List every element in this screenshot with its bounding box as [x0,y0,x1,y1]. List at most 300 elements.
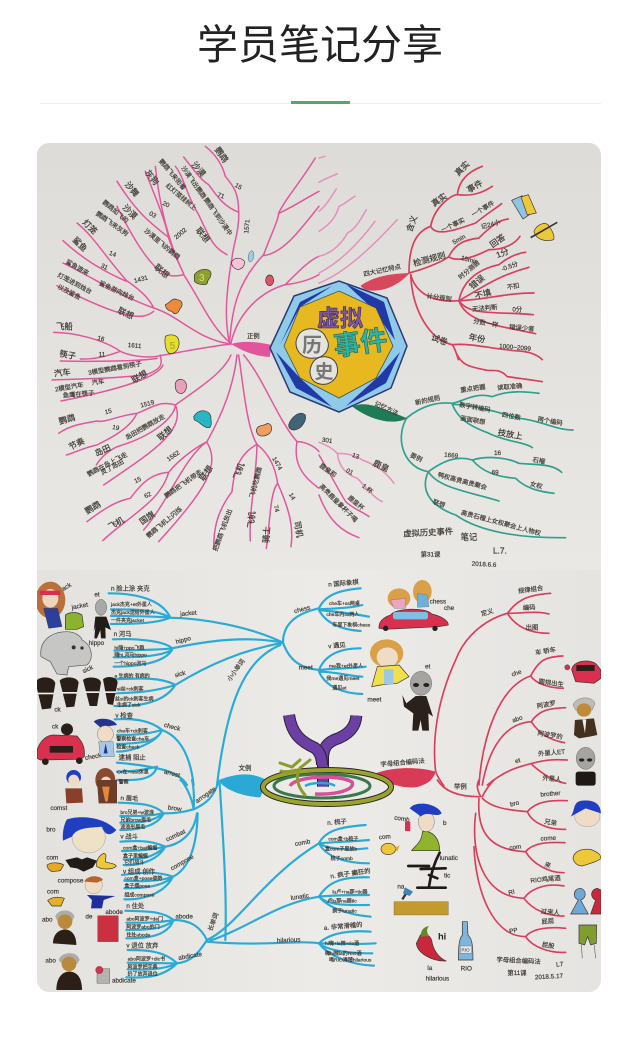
branch text: tic [444,872,450,879]
branch text: memory method and signature: L.7. [493,545,507,555]
branch text: 丝si的ck刺客生病 [115,696,153,703]
branch text: definition and planning: 1000~2099 [499,343,532,353]
icon: old man with book [56,953,110,990]
branch text: com [47,888,59,895]
branch text: 遇见et [332,684,347,691]
icon: red car front [565,661,601,683]
branches: bottom-left pink [52,355,319,552]
branch text: come [540,835,557,843]
branch text: L7 [556,961,564,969]
branch text: definition and planning: 不填 [474,287,492,301]
branch text: 兄弟 [544,816,558,827]
branch text: 外星人ET [538,747,566,758]
yellow core [284,291,393,398]
branch text: left top: 1571 [243,219,252,234]
branch text: memory method and signature: 69 [492,469,499,476]
branch text: definition and planning: 记24小 [480,217,502,231]
branch text: memory method and signature: 2018.6.6 [472,561,497,569]
icon: green pants [579,925,597,958]
branch text: left top: 鹦鹉 [213,145,230,164]
branch text: n 河马 [114,630,132,638]
branch text: definition and planning: 一个事实 [439,215,466,234]
branch text: Or在+rest休息 [117,768,149,775]
branch text: left top: 15 [233,182,243,192]
panel: student notes photo [35,143,601,992]
branch text: abo阿波罗+dic书 [128,956,165,963]
branch text: 住处abode [126,932,150,939]
branch text: RIO [461,966,472,973]
branch text: left top: 筷子 [59,348,77,361]
branch text: 第11课 [507,968,527,977]
branch text: 组成compose [124,892,155,899]
branch text: brow [167,804,182,813]
branch text: 定义 [480,606,495,618]
branch text: definition and planning: 检测规则 [412,250,447,268]
emblem text: 事件 [332,325,389,362]
branch text: PP [509,927,518,935]
spiral base rings [263,770,391,804]
branch text: definition and planning: 含义 [404,214,419,233]
branch text: hi嗨+la辣+rio酒 [325,940,359,947]
branch text: definition and planning: 1分 [495,246,510,260]
branch text: memory method and signature: 鹿皇杯 [346,493,367,512]
branch text: lower left: 62 [143,491,153,500]
icon: lunatic character [408,853,446,888]
branch text: abode [105,909,123,916]
branch text: me我+et外星人 [329,662,363,669]
icon: game pieces [571,888,601,914]
blob: central pink connector [231,342,272,357]
branch text: 盒com子里放b [325,846,357,853]
branch text: lower left: 飞机吃鹦鹉 [247,466,264,499]
branch text: abdicate [178,951,203,962]
emblem text [296,305,389,384]
icon: alien [94,599,111,638]
branch text: memory method and signature: 1.杯 [360,481,376,496]
icon: bat, arm and bottle [47,853,116,872]
icon: alien head right [576,747,596,786]
branch text: memory method and signature: 第31课 [421,550,441,559]
branch text: sick [82,664,95,675]
branch text: 车 轿车 [534,644,556,657]
branch text: 警察 [119,778,129,785]
icon: RIO bottle: RIO [461,948,470,953]
blob: blue connector [219,774,267,797]
branch text: 梳子comb [331,855,353,862]
branch text: memory method and signature: 重点把握 [460,382,487,394]
branch text: lunatic [440,855,458,862]
branch text: b [443,820,447,827]
branches: lower-right [319,780,601,983]
branch text: 举例 [454,781,467,790]
branch text: combat [165,828,187,843]
branch text: lower left: 1562 [166,449,182,463]
branch text: ck [54,707,61,714]
branch text: lower left: 骑士 [261,526,272,543]
branch text: left top: 沙漠飞出鹦鹉 [179,164,208,200]
branch text: 出图 [526,622,538,631]
branch text: che [444,605,455,612]
branch text: memory method and signature: 高贵石榴上女权聚会上人物权 [460,508,543,538]
slingshot left prong [289,715,322,765]
icon: slingshot right part [323,716,356,787]
branch text: chess [293,604,311,615]
branch text: meet [367,697,382,704]
branch text: 2018.5.17 [535,973,564,981]
branch text: lower left: 1519 [140,399,156,410]
branch text: lower left: 鹦鹉在岛上飞走 [85,449,129,478]
branch text: 字母组合编码法 [380,756,425,769]
branch text: lower left: 岛田 [93,442,112,458]
branch text: left top: 以及鲨鱼 [56,282,83,302]
branch text: hippo [89,640,105,647]
branch text: lower left: 鹦鹉把飞机带走 [162,467,204,500]
branch text: arrest [163,768,181,779]
branch text: 阿波罗的 [537,728,563,741]
branch text: left top: 鲨鱼游向烛台 [98,278,136,303]
icon: sick coffins [35,677,118,709]
branch text: lower left: 飞机 [231,461,246,481]
branch text: left top: 14 [108,250,117,259]
branch text: 检查check [116,743,140,750]
branch text: RI [508,888,516,897]
branch text: compose [58,878,84,885]
branch text: 文例 [239,763,251,772]
icon: girl meet [370,639,409,687]
branch text: com [509,843,522,852]
branch text: left top: 71 [216,192,226,201]
branch text: left top: 沙漠里飞的鹦鹉 [142,226,182,261]
branch text: 一件夹克jacket [111,617,145,624]
branch text: et [94,592,100,599]
icons: small people [65,776,117,803]
blob: red connector end [390,780,431,786]
branch text: memory method and signature: 两个编码 [537,414,563,427]
branch text: abo阿波罗+de门 [126,916,163,923]
icon: blue hair boy right [571,800,601,827]
branch text: lower left: 汽车 [91,376,105,387]
branch text: memory method and signature: 读取准确 [497,381,523,392]
branch text: chess [430,598,446,605]
branch text: ck [52,723,59,730]
branch text: left top: 红灯笼挂树上 [164,181,199,213]
branch text: left top: 沙舞 [123,180,141,199]
icon: book [512,195,536,219]
branch text: 逮捕 阻止 [119,752,146,761]
emblem text: 史 [314,361,334,383]
branch text: definition and planning: 真实 [429,191,449,209]
panel: history events mind map [52,145,573,569]
branch text: compose [169,853,196,872]
branch text: definition and planning: 回答 [488,231,508,250]
branch text: 车里下象棋chess [332,622,371,629]
branch text: definition and planning: 计分规则 [426,291,452,303]
branch text: 扔了放弃退位 [128,970,158,977]
branch text: 警察检查che车 [116,736,149,743]
emblem text: 虚拟 [317,305,363,331]
central emblem: history events octagon [270,281,407,412]
branch text: che车内ss两人 [326,611,359,618]
icon: blue-haired boy [63,817,116,853]
branch text: 规律组合 [517,583,544,595]
branch text: memory method and signature: 虚拟历史事件 [403,526,453,539]
branch text: memory method and signature: 16 [494,450,502,457]
branches: bottom-right green [318,355,573,569]
branch text: comb [394,814,411,824]
branch text: left top: 2002 [173,226,189,241]
branch text: 一个hippo河马 [114,660,146,667]
branch text: left top: 鹦鹉飞来灰狗 [94,209,130,238]
branch text: left top: 31 [99,262,109,272]
branch text: left top: 联想 [152,262,172,280]
branch text: n 国际象棋 [328,577,360,589]
branch text: 它们战斗 [124,859,144,866]
branch text: left top: 1611 [127,342,142,350]
branch text: hi嗨+ppo飞跑 [114,644,144,651]
branch text: definition and planning: 错误少者 [509,322,535,333]
blob: red connector [376,768,436,788]
branch text: 兄弟brow眉毛 [120,816,151,823]
icon: hippo [41,632,91,675]
branch text: memory method and signature: 要例 [409,450,424,464]
branch text: lower left: 14 [287,492,297,502]
branch text: lower left: 19 [112,424,120,432]
branch text: n. 梳子 [327,816,348,827]
icon: hammer and log [394,887,448,915]
branch text: definition and planning: 四大记忆特点 [363,261,402,278]
branch text [42,785,311,985]
icon: girl with jacket [35,582,84,629]
branch text: lower left: 飞机 [246,510,257,528]
branch text: definition and planning: 事件 [465,178,484,195]
branch text: bro [509,799,520,809]
branch text: left top: 飞船 [56,322,73,332]
branch text: lower left: 74 [272,504,280,513]
icon: yellow teapot [381,843,400,855]
branch text: memory method and signature: 石榴 [532,455,547,466]
branch text: 阿波罗 [536,698,556,710]
branch text: lower left: 汽车 [53,366,71,379]
branch text: 编码 [523,602,536,612]
branch text: lower left: 岛田把鹦鹉放走 [123,411,167,442]
branch text: v 组成 创作 [123,866,156,875]
branch text: definition and planning: 真实 [453,159,472,178]
branch text: left top: 03 [148,210,158,220]
branch text: lower left: 1474 [270,456,284,472]
branch text: lower left: 灵了岛田 [99,457,125,477]
branch text: memory method and signature: 笔记 [461,532,477,542]
branch text: lower left: 3模型鹦鹉看到筷子 [87,359,143,377]
branch text: definition and planning: 5min [451,233,467,246]
branch text: comb [294,838,311,848]
branch text: memory method and signature: 数字转编码 [459,400,491,414]
branch text: lower left: 国旗 [137,509,157,527]
branch text: comst [50,805,67,812]
branch text: a. 非常滑稽的 [323,920,363,932]
branch text: memory method and signature: 13 [351,452,360,461]
branch text: v 遇见 [328,641,346,650]
branch text: 长单词 [205,911,220,932]
branch text: a 生病的 有病的 [114,672,150,679]
branch text: left top: 16 [96,335,106,344]
branch text: 阿波罗abo的门 [126,924,160,931]
branch text: check [84,752,103,762]
branch text: definition and planning: 年份 [468,332,487,345]
branch text: lu卢+na那+tic踢 [332,888,368,895]
branch text: lower left: 15 [133,476,143,485]
branches: top-left pink [54,145,319,361]
icon: yellow glove [573,849,601,866]
branch text: lower left: 联想 [130,368,149,385]
icon: hand holding pen [531,222,557,241]
title divider with green accent [40,101,601,104]
branch text: che车+ss两桌 [329,600,360,607]
branch text: meet [299,664,313,671]
branch text: hi [438,931,446,941]
branch text: lower left [53,359,305,552]
icon: old man with door [53,910,118,945]
title: 学员笔记分享 [197,11,443,71]
branch text [326,577,566,784]
icon: compose person [48,876,115,908]
branch text: 小小单词 [225,657,246,683]
branch text: hilarious [277,936,301,945]
branch text: bro兄弟+w波浪 [120,809,154,816]
branch text: left top: 沙漠 [189,160,208,179]
branch text: definition and planning [363,159,535,353]
branch text: jacket [179,610,197,618]
branch text: left top: 灰狗 [143,168,161,187]
branch text: memory method and signature: 画面联想 [460,413,487,426]
branch text: la [427,965,433,972]
branch text: 字母组合编码法 [496,955,541,966]
branch text: definition and planning: 错误 [467,272,487,291]
branch text: jack [59,581,73,594]
branch text: memory method and signature: 1669 [444,452,459,460]
branch text: definition and planning: -0.5分 [500,259,520,273]
branch text: 外星人 [542,773,563,784]
branch text: RIO鸡尾酒 [530,873,562,885]
branch text: v 退位 放弃 [126,941,158,950]
branch text: de [85,913,93,920]
icon: policeman [94,719,117,757]
branch text: brother [540,790,561,799]
branch text: abode [175,913,193,920]
branch text: 嗨hi辣la的RIO酒 [325,950,362,957]
branch text: memory method and signature: 联想 [432,497,447,510]
branch text: definition and planning: 试卷 [430,332,450,347]
branch text: v 检查 [115,710,134,719]
branches: lower-left [42,774,319,990]
branch text: 疯子lunatic [332,908,357,915]
branches: upper-right [319,577,601,788]
branch text: lower left: 把鹦鹉飞机放出 [210,508,234,552]
branch text: memory method and signature [318,381,563,569]
branch text: left top: 联想 [116,305,135,321]
branch text: 卢lu那na踢tic [327,898,357,905]
branch text: lower left: 飞机 [106,514,126,532]
branch text: 过来人 [540,906,561,917]
branch text: left top: 灯笼 [81,217,99,236]
branch text: 喝RIO滑稽hilarious [329,957,372,964]
branch text: left top: 鹦鹉如飞的 [101,198,131,225]
branch text: abo [45,958,56,965]
emblem text: 历 [302,335,322,357]
branch text: abo [511,714,524,725]
branch text: lower left: 鹦鹉飞机上闪烁 [144,504,184,540]
branch text: n 脸上涂 夹克 [111,584,150,593]
branch text: lower left: 15 [104,408,113,416]
branch text: left top: 鲨鱼游来 [64,257,91,278]
branch text: hippo [175,635,192,646]
branch text: lower left: 鹦鹉 [83,499,102,516]
branch text: left top: 鲨鱼 [71,235,89,254]
snake figure [280,760,310,795]
branch text: lunatic [290,892,309,902]
branch text: definition and planning: 一个事件 [469,198,496,219]
branch text: na [397,883,405,890]
branch text: memory method and signature: 女权 [529,479,544,491]
branch text [323,781,564,983]
branch text: 盒子摆pose [124,882,150,889]
branch text: n. 疯子 癫狂的 [330,866,371,880]
branch text: memory method and signature: 四位数 [501,410,522,422]
icon: chili [416,926,446,961]
branch text: 嗨hi,河马hippo [114,652,147,659]
branch text: che [511,668,523,679]
branches: top-right red [319,156,557,360]
branch text: left top: 11 [99,351,106,358]
branch text: memory method and signature: 技放上 [497,427,523,441]
branch text: bro [46,827,56,834]
branch text [52,581,313,785]
branch text: left top: 鹦鹉飞到沙漠中 [202,196,235,237]
branch text: check [163,722,182,733]
branch text: lower left: 鹦鹉 [58,412,76,426]
branch text: com [46,854,58,861]
branch text: definition and planning: 15min [460,255,479,266]
branch text: arrogate [194,785,218,805]
icon: old man [573,698,597,738]
icon: red car with two girls [379,580,448,631]
branch text: lower left: 2模型汽车 [54,380,84,394]
number icons [175,379,306,436]
branch text: lower left: 鱼鹰在筷子 [62,388,95,400]
branch text: memory method and signature: 301 [321,437,333,445]
central slingshot and spiral base [263,715,391,804]
branch text: com盒+b梳子 [328,836,358,843]
branch text: memory method and signature: 记忆方法 [373,399,400,418]
branch text: 来 [543,860,553,870]
icon: RIO bottle [458,922,473,960]
icon: boy with comb [405,804,442,851]
branch text: che车+ck刺客 [117,728,148,735]
branch text: lower left: 联想 [197,463,215,483]
branch text: left top: 灯笼进到烛台 [56,270,94,296]
branch text: com [379,833,391,841]
branches: upper-left blue [35,581,319,792]
branch text: lower left: 司机 [292,520,305,539]
branch text: com盒+pose姿势 [124,875,162,882]
number icons [165,250,274,354]
branch text: definition and planning: 分数一样 [473,316,499,329]
branch text: 杰克jack送给外星人 [111,609,155,616]
branch text: memory method and signature: 鸭权高贵高贵聚会 [437,470,489,492]
branch text: 屁股 [541,941,556,950]
branch text: 屁屁 [541,917,555,926]
branch text: definition and planning: 不扣 [506,281,520,292]
branch text: 阿波罗把字典 [128,963,158,970]
